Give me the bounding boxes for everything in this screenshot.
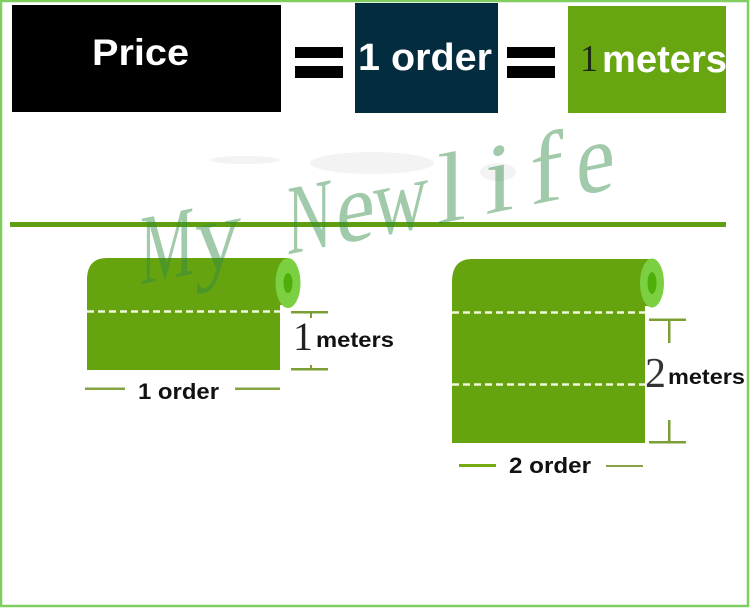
divider line	[10, 222, 726, 227]
watermark: f	[530, 109, 563, 227]
height label: meters	[668, 366, 745, 389]
panel: 1 meters: 1	[580, 38, 598, 80]
icon: first equals sign	[295, 47, 343, 78]
fold line	[87, 310, 280, 313]
roll body	[452, 259, 652, 443]
width label: 2 order	[509, 453, 591, 478]
panel: 1 order	[355, 3, 498, 113]
watermark	[140, 99, 615, 306]
height label	[293, 314, 394, 359]
watermark: M	[140, 184, 194, 306]
smudge	[210, 152, 516, 181]
diagram: 2 order roll	[452, 258, 745, 478]
watermark: e	[336, 148, 375, 266]
panel: 1 meters	[568, 6, 727, 113]
fold lines	[452, 312, 645, 384]
watermark: w	[373, 137, 428, 259]
watermark: i	[485, 119, 514, 236]
watermark: N	[287, 156, 332, 276]
dimension bracket	[291, 311, 328, 370]
watermark: y	[195, 175, 241, 295]
watermark: l	[437, 129, 466, 246]
height label: meters	[316, 329, 394, 352]
watermark: e	[576, 99, 615, 218]
panel: price: Price	[92, 32, 189, 73]
roll body	[87, 258, 288, 370]
height label: 2	[645, 351, 666, 397]
roll end	[640, 258, 664, 308]
dimension bracket	[649, 318, 686, 444]
panel: 1 meters: meters	[602, 39, 727, 81]
icon: second equals sign	[507, 47, 555, 78]
height label: 1	[293, 314, 313, 359]
width label: 1 order	[138, 379, 219, 404]
roll end	[276, 258, 300, 308]
height label	[645, 351, 745, 397]
diagram: 1 order roll	[85, 258, 394, 404]
panel: 1 order: 1 order	[358, 37, 492, 79]
panel: price	[12, 5, 281, 112]
width label	[459, 453, 643, 478]
